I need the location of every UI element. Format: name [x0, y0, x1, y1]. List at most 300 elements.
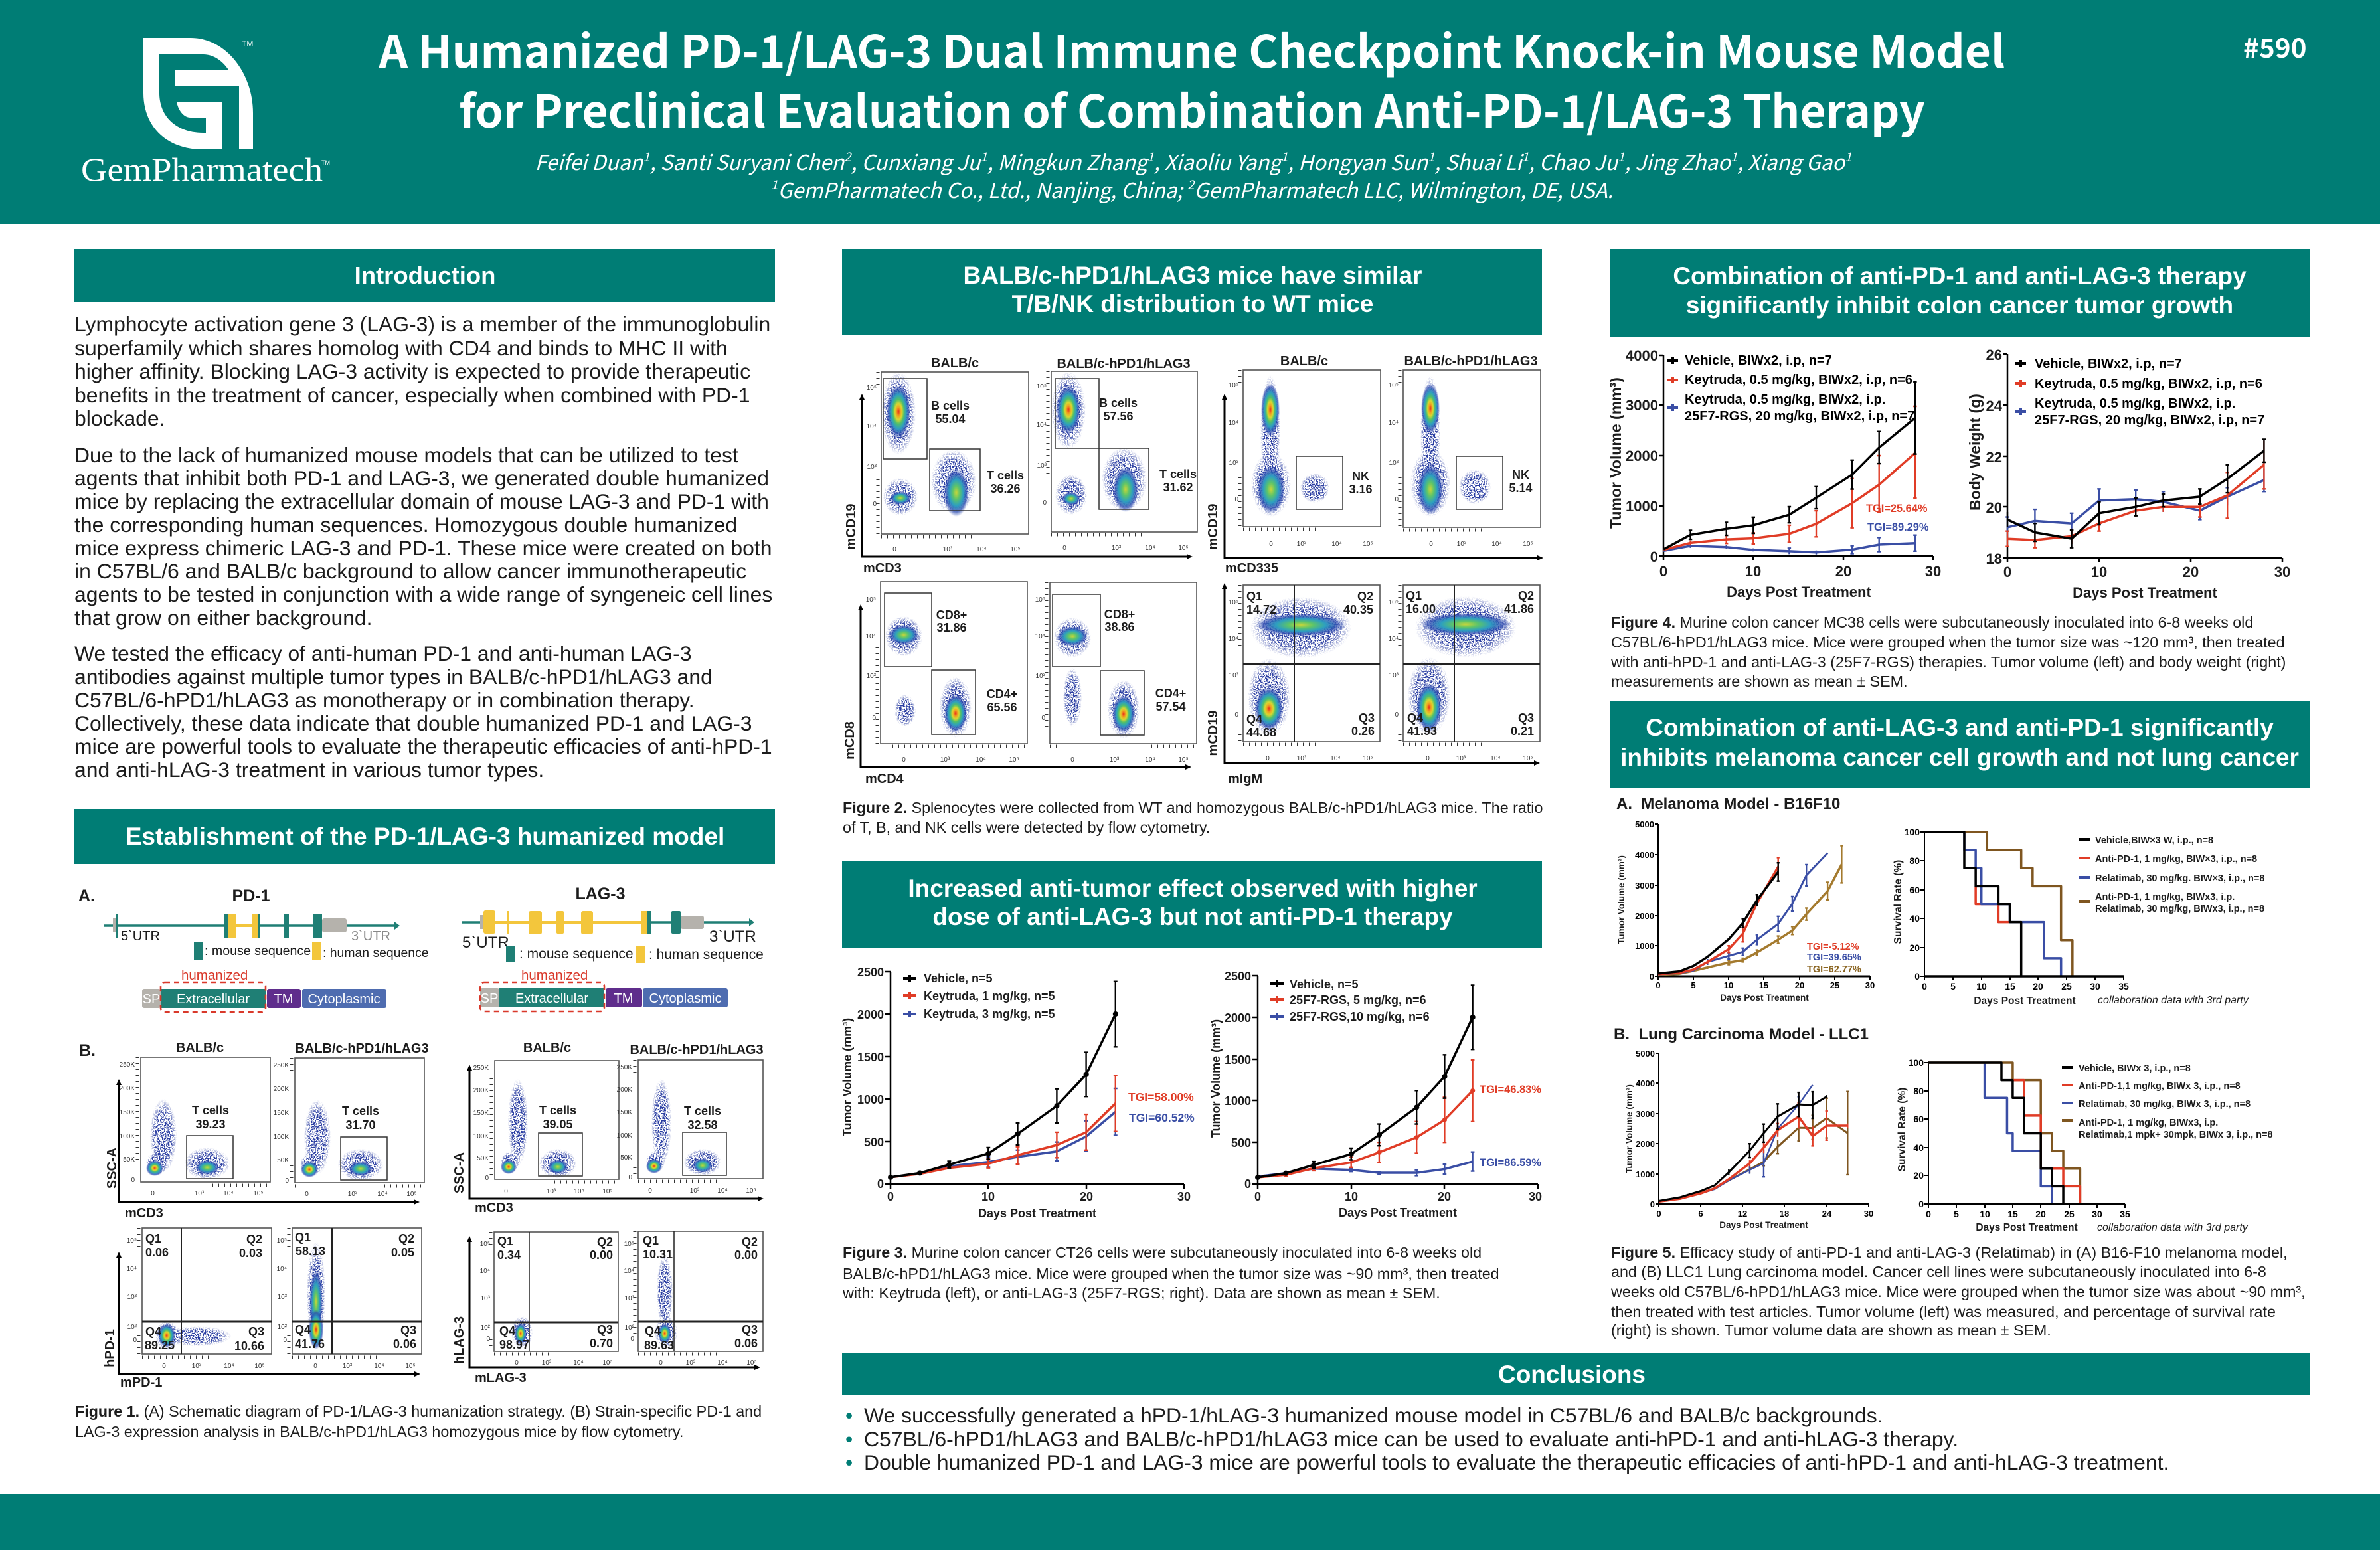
- chart: melanoma tumor volume: 15: [1759, 980, 1768, 990]
- text block: introduction body: benefits in the treatment of cancer, especially when combined with PD-1: [74, 383, 750, 407]
- icon: GemPharmatech logo: TM: [242, 39, 253, 48]
- legend: melanoma survival: [2079, 835, 2264, 914]
- figure 1B: hPD-1 / mPD-1 quadrant plots: 10⁵: [405, 1363, 416, 1370]
- chart: tumor volume Keytruda: 20: [1080, 1190, 1093, 1203]
- figure 2 caption: of T, B, and NK cells were detected by flow cytometry.: [843, 819, 1210, 836]
- figure 5 caption: Figure 5. Efficacy study of anti-PD-1 and anti-LAG-3 (Relatimab) in (A) B16-F10 melanoma model,: [1611, 1244, 2288, 1261]
- legend: melanoma survival: Relatimab, 30 mg/kg, BIWx3, i.p., n=8: [2095, 904, 2264, 914]
- chart: melanoma tumor volume: TGI=39.65%: [1807, 952, 1861, 963]
- figure 1B: hPD-1 / mPD-1 quadrant plots: 10³: [278, 1294, 288, 1301]
- chart: MC38 body weight: 20: [2183, 564, 2199, 580]
- figure 1B: SSC-A / mCD3 flow plots for LAG-3: 39.05: [543, 1118, 573, 1131]
- chart: melanoma survival: 20: [2033, 981, 2043, 991]
- figure 1B: SSC-A / mCD3 flow plots for LAG-3: 50K: [477, 1155, 489, 1162]
- chart: MC38 body weight: 18: [1986, 551, 2002, 567]
- figure 4 caption: C57BL/6-hPD1/hLAG3 mice. Mice were grouped when the tumor size was ~120 mm³, then treated: [1611, 634, 2285, 651]
- figure 1B: SSC-A / mCD3 flow plots for PD-1: T cells: [342, 1104, 379, 1118]
- figure 1B: SSC-A / mCD3 flow plots for LAG-3: 250K: [617, 1064, 632, 1071]
- chart: lung carcinoma survival: 30: [2092, 1209, 2102, 1219]
- figure 1 caption: [75, 1403, 762, 1440]
- figure 1B: hPD-1 / mPD-1 quadrant plots: Q3: [248, 1325, 264, 1338]
- figure 2: mCD19 vs mCD3 flow plots: [844, 356, 1197, 576]
- panel: T/B/NK distribution: T/B/NK distribution to WT mice: [1012, 290, 1373, 317]
- figure 1A: LAG-3 gene schematic: 5`UTR: [462, 934, 509, 952]
- chart: lung carcinoma tumor volume: 0: [1650, 1199, 1655, 1209]
- chart: MC38 body weight: 30: [2274, 564, 2290, 580]
- figure 1B: hPD-1 / mPD-1 quadrant plots: 89.25: [145, 1339, 175, 1352]
- text block: introduction body: Lymphocyte activation gene 3 (LAG-3) is a member of the immunoglobulin: [74, 312, 770, 336]
- figure 2: mCD19 vs mIgM quadrant plots: 0.21: [1511, 725, 1534, 738]
- figure 2: mCD19 vs mCD3 flow plots: 10⁵: [1037, 383, 1047, 390]
- legend: lung carcinoma survival: Anti-PD-1, 1 mg/kg, BIWx3, i.p.: [2079, 1118, 2218, 1128]
- chart: lung carcinoma tumor volume: 18: [1780, 1209, 1789, 1219]
- figure 1A: PD-1 gene schematic: humanized: [181, 968, 248, 983]
- panel: melanoma and lung cancer: [1610, 701, 2310, 1339]
- chart: melanoma survival: Days Post Treatment: [1974, 995, 2076, 1007]
- figure 1A: LAG-3 gene schematic: 3`UTR: [709, 928, 756, 946]
- figure 1B: SSC-A / mCD3 flow plots for PD-1: 200K: [274, 1086, 289, 1093]
- figure 1B: hPD-1 / mPD-1 quadrant plots: Q2: [246, 1233, 262, 1246]
- figure 1B: hPD-1 / mPD-1 quadrant plots: Q4: [295, 1323, 311, 1336]
- figure 2: mCD19 vs mCD3 flow plots: 10⁴: [1037, 422, 1047, 429]
- figure 2: mCD19 vs mIgM quadrant plots: Q3: [1518, 711, 1534, 725]
- figure 1B: SSC-A / mCD3 flow plots for PD-1: 50K: [277, 1157, 289, 1164]
- text block: conclusions list: •: [845, 1450, 853, 1474]
- figure 1B: SSC-A / mCD3 flow plots for PD-1: 250K: [274, 1062, 289, 1069]
- figure 1A: PD-1 gene schematic: PD-1: [232, 887, 270, 905]
- figure 2: mCD19 vs mCD335 flow plots: 10³: [1457, 541, 1467, 548]
- figure 2: mCD19 vs mCD335 flow plots: BALB/c-hPD1/hLAG3: [1404, 354, 1538, 369]
- figure 2: mCD8 vs mCD4 flow plots: 10⁵: [1178, 756, 1189, 764]
- figure 1B: hLAG-3 / mLAG-3 quadrant plots: [452, 1231, 763, 1385]
- figure 5 caption: then treated with test articles. Tumor volume (left) was measured, and percentage of survival rate: [1611, 1303, 2276, 1320]
- figure 1A: LAG-3 gene schematic: : mouse sequence: [519, 946, 634, 962]
- chart: tumor volume Keytruda: 1000: [857, 1093, 884, 1106]
- text block: conclusions list: [845, 1403, 2169, 1474]
- chart: lung carcinoma tumor volume: 30: [1864, 1209, 1873, 1219]
- figure 1A: LAG-3 gene schematic: Extracellular: [515, 991, 588, 1006]
- figure 2: mCD8 vs mCD4 flow plots: 65.56: [987, 701, 1017, 714]
- figure 1B: hPD-1 / mPD-1 quadrant plots: 10⁴: [277, 1266, 287, 1273]
- chart: tumor volume Keytruda: 0: [887, 1190, 894, 1203]
- figure 2: mCD19 vs mIgM quadrant plots: 10³: [1229, 672, 1239, 679]
- figure 1B: SSC-A / mCD3 flow plots for LAG-3: 50K: [620, 1154, 632, 1162]
- text block: conclusions list: •: [845, 1427, 853, 1451]
- legend: melanoma survival: Anti-PD-1, 1 mg/kg, BIW×3, i.p., n=8: [2095, 854, 2257, 865]
- text block: introduction body: mice express chimeric LAG-3 and PD-1. These mice were created on both: [74, 536, 772, 560]
- figure 1B: SSC-A / mCD3 flow plots for PD-1: SSC-A: [105, 1148, 120, 1189]
- figure 2: mCD19 vs mIgM quadrant plots: 44.68: [1246, 726, 1276, 739]
- chart: melanoma survival: 0: [1922, 981, 1927, 991]
- figure 2: mCD19 vs mIgM quadrant plots: mCD19: [1206, 711, 1221, 756]
- chart: lung carcinoma tumor volume: Tumor Volume (mm³): [1624, 1084, 1634, 1173]
- figure 1B: SSC-A / mCD3 flow plots for LAG-3: 150K: [473, 1110, 489, 1117]
- legend: lung carcinoma survival: Relatimab, 30 mg/kg, BIWx 3, i.p., n=8: [2079, 1099, 2251, 1110]
- legend: MC38 tumor volume: 25F7-RGS, 20 mg/kg, BIWx2, i.p, n=7: [1685, 409, 1914, 424]
- panel: conclusions: [842, 1353, 2310, 1474]
- figure 1B: hLAG-3 / mLAG-3 quadrant plots: hLAG-3: [452, 1316, 467, 1364]
- panel: introduction: Introduction: [355, 262, 495, 289]
- chart: lung carcinoma survival: 0: [1918, 1199, 1924, 1209]
- legend: MC38 body weight: Keytruda, 0.5 mg/kg, BIWx2, i.p, n=6: [2035, 377, 2262, 391]
- chart: MC38 body weight: 22: [1986, 449, 2002, 466]
- panel: increased anti-tumor effect: Increased anti-tumor effect observed with higher: [908, 875, 1478, 902]
- chart: MC38 body weight: [1966, 347, 2290, 601]
- figure 1B: hPD-1 / mPD-1 quadrant plots: 10⁴: [224, 1363, 234, 1370]
- figure 1B: hPD-1 / mPD-1 quadrant plots: 10⁴: [127, 1266, 137, 1273]
- figure 1B: hLAG-3 / mLAG-3 quadrant plots: Q4: [499, 1324, 515, 1337]
- figure 1B: SSC-A / mCD3 flow plots for LAG-3: SSC-A: [452, 1152, 467, 1193]
- icon: GemPharmatech logo: TM: [321, 159, 330, 166]
- figure 1B: SSC-A / mCD3 flow plots for LAG-3: mCD3: [475, 1201, 513, 1215]
- figure 2: mCD19 vs mCD335 flow plots: 0: [1429, 541, 1433, 548]
- figure 2: mCD19 vs mIgM quadrant plots: 0.26: [1351, 725, 1375, 738]
- chart: melanoma survival: 35: [2118, 981, 2129, 991]
- chart: lung carcinoma tumor volume: 3000: [1636, 1109, 1655, 1119]
- chart: MC38 tumor volume: 1000: [1626, 498, 1658, 515]
- chart: tumor volume Keytruda: 2500: [857, 966, 884, 979]
- chart: lung carcinoma tumor volume: Days Post Treatment: [1719, 1220, 1808, 1230]
- figure 2: mCD8 vs mCD4 flow plots: 31.86: [936, 621, 967, 634]
- figure 1B: SSC-A / mCD3 flow plots for PD-1: 10⁴: [223, 1190, 234, 1197]
- chart: tumor volume Keytruda: [841, 966, 1195, 1220]
- figure 1B: hPD-1 / mPD-1 quadrant plots: 0.06: [393, 1337, 416, 1351]
- figure 1A: PD-1 gene schematic: Cytoplasmic: [308, 992, 380, 1007]
- figure 2: mCD19 vs mIgM quadrant plots: 14.72: [1246, 603, 1276, 616]
- figure 1B: SSC-A / mCD3 flow plots for PD-1: mCD3: [125, 1206, 163, 1221]
- figure 1A: LAG-3 gene schematic: TM: [614, 991, 633, 1006]
- chart: melanoma tumor volume: 25: [1830, 980, 1839, 990]
- figure 2: mCD8 vs mCD4 flow plots: 10⁴: [1035, 633, 1045, 640]
- figure 1B: hLAG-3 / mLAG-3 quadrant plots: 10³: [481, 1295, 491, 1302]
- figure 2: mCD8 vs mCD4 flow plots: 10⁴: [976, 756, 986, 764]
- chart: lung carcinoma survival: 60: [1913, 1114, 1924, 1124]
- figure 2: mCD19 vs mCD3 flow plots: BALB/c: [931, 356, 979, 371]
- figure 1B: SSC-A / mCD3 flow plots for LAG-3: 10⁴: [574, 1188, 584, 1195]
- figure 1B: SSC-A / mCD3 flow plots for LAG-3: T cells: [684, 1104, 721, 1118]
- figure 2: mCD19 vs mCD335 flow plots: NK: [1352, 470, 1369, 483]
- figure 2 caption: Figure 2. Splenocytes were collected from WT and homozygous BALB/c-hPD1/hLAG3 mice. The ratio: [843, 799, 1543, 816]
- header band: [0, 0, 2380, 224]
- figure 2: mCD19 vs mCD335 flow plots: 0: [1269, 541, 1273, 548]
- chart: melanoma tumor volume: Tumor Volume (mm³): [1616, 855, 1626, 944]
- figure 2: mCD19 vs mCD3 flow plots: 10⁴: [867, 423, 877, 430]
- figure 2: mCD19 vs mIgM quadrant plots: 10⁴: [1229, 636, 1238, 643]
- chart: lung carcinoma survival: Days Post Treatment: [1976, 1222, 2078, 1233]
- figure 1B: hLAG-3 / mLAG-3 quadrant plots: 10⁵: [602, 1359, 613, 1367]
- figure 2: mCD19 vs mCD335 flow plots: 10⁵: [1389, 382, 1399, 389]
- figure 2: mCD19 vs mIgM quadrant plots: 41.93: [1407, 725, 1437, 738]
- legend: MC38 tumor volume: Keytruda, 0.5 mg/kg, BIWx2, i.p, n=6: [1685, 373, 1912, 387]
- figure 1B: SSC-A / mCD3 flow plots for PD-1: 250K: [120, 1061, 135, 1069]
- figure 1A: PD-1 gene schematic: : human sequence: [323, 946, 429, 960]
- chart: lung carcinoma survival: 5: [1954, 1209, 1959, 1219]
- panel: colon cancer combination: Combination of anti-PD-1 and anti-LAG-3 therapy: [1673, 262, 2247, 290]
- figure 2: mCD19 vs mIgM quadrant plots: Q2: [1518, 589, 1534, 602]
- figure 1B: hLAG-3 / mLAG-3 quadrant plots: Q4: [645, 1324, 661, 1337]
- figure 2: mCD19 vs mCD3 flow plots: 0: [1062, 545, 1066, 552]
- figure 2: mCD19 vs mCD3 flow plots: 31.62: [1163, 481, 1193, 494]
- legend: lung carcinoma survival: [2062, 1063, 2273, 1140]
- text block: introduction body: We tested the efficacy of anti-human PD-1 and anti-human LAG-3: [74, 642, 691, 665]
- figure 1B: hPD-1 / mPD-1 quadrant plots: 10⁵: [127, 1237, 137, 1245]
- figure 2: mCD19 vs mCD3 flow plots: 10³: [943, 546, 953, 553]
- figure 2: mCD8 vs mCD4 flow plots: 10³: [867, 673, 877, 680]
- authors and affiliations: 1GemPharmatech Co., Ltd., Nanjing, China; 2GemPharmatech LLC, Wilmington, DE, USA.: [771, 175, 1613, 205]
- figure 1B: hPD-1 / mPD-1 quadrant plots: 0: [162, 1363, 166, 1370]
- legend: Keytruda chart: [903, 972, 1055, 1021]
- panel: increased anti-tumor effect: dose of anti-LAG-3 but not anti-PD-1 therapy: [932, 903, 1453, 930]
- icon: GemPharmatech logo: GemPharmatech: [81, 151, 323, 188]
- chart: lung carcinoma survival: 10: [1980, 1209, 1990, 1219]
- figure 1B: hPD-1 / mPD-1 quadrant plots: 0.03: [239, 1247, 262, 1260]
- figure 1B: hLAG-3 / mLAG-3 quadrant plots: 98.97: [499, 1338, 529, 1351]
- chart: tumor volume 25F7-RGS: 1000: [1225, 1094, 1251, 1108]
- figure 2: mCD19 vs mCD3 flow plots: 10⁵: [867, 385, 877, 392]
- figure 1B: SSC-A / mCD3 flow plots for PD-1: T cells: [192, 1104, 229, 1117]
- heading: melanoma model: A. Melanoma Model - B16F10: [1616, 795, 1840, 813]
- figure 1B: SSC-A / mCD3 flow plots for PD-1: 10⁴: [377, 1191, 388, 1198]
- figure 1B: SSC-A / mCD3 flow plots for PD-1: 10³: [348, 1191, 358, 1198]
- chart: melanoma tumor volume: 0: [1650, 972, 1654, 982]
- figure 2: mCD19 vs mCD335 flow plots: [1206, 354, 1543, 576]
- figure 2: mCD19 vs mCD335 flow plots: 10⁴: [1229, 420, 1238, 427]
- figure 1B: SSC-A / mCD3 flow plots for PD-1: 200K: [120, 1085, 135, 1092]
- figure 1A: PD-1 gene schematic: 3`UTR: [351, 929, 390, 944]
- text block: introduction body: that grow on either background.: [74, 606, 373, 630]
- chart: tumor volume Keytruda: 500: [864, 1136, 884, 1149]
- figure 1 caption: Figure 1. (A) Schematic diagram of PD-1/LAG-3 humanization strategy. (B) Strain-specific PD-1 and: [75, 1403, 762, 1420]
- panel: T/B/NK distribution: BALB/c-hPD1/hLAG3 mice have similar: [964, 262, 1422, 289]
- chart: tumor volume 25F7-RGS: 30: [1529, 1190, 1542, 1203]
- chart: tumor volume 25F7-RGS: 2500: [1225, 970, 1251, 983]
- chart: tumor volume 25F7-RGS: 1500: [1225, 1053, 1251, 1067]
- figure 1B: SSC-A / mCD3 flow plots for LAG-3: 0: [648, 1187, 652, 1195]
- figure 2: mCD19 vs mIgM quadrant plots: 10⁴: [1490, 755, 1501, 762]
- figure 1B: SSC-A / mCD3 flow plots for LAG-3: 100K: [473, 1133, 489, 1140]
- figure 2: mCD19 vs mIgM quadrant plots: Q4: [1407, 711, 1423, 725]
- figure 2: mCD19 vs mIgM quadrant plots: 10⁵: [1389, 599, 1399, 606]
- figure 2: mCD8 vs mCD4 flow plots: 10³: [940, 756, 950, 764]
- figure 2: mCD8 vs mCD4 flow plots: 10⁵: [1035, 596, 1045, 604]
- figure 2: mCD19 vs mIgM quadrant plots: Q4: [1246, 713, 1262, 726]
- figure 1A: LAG-3 gene schematic: LAG-3: [575, 885, 626, 903]
- figure 1B: SSC-A / mCD3 flow plots for LAG-3: 10⁵: [602, 1188, 613, 1195]
- figure 2: mCD19 vs mCD335 flow plots: 10⁴: [1389, 420, 1399, 427]
- figure 1B: hLAG-3 / mLAG-3 quadrant plots: 0: [515, 1359, 519, 1367]
- figure 1B: hLAG-3 / mLAG-3 quadrant plots: 0.70: [590, 1337, 613, 1350]
- figure 1B: hLAG-3 / mLAG-3 quadrant plots: 10²: [625, 1324, 635, 1332]
- chart: melanoma survival: 60: [1909, 885, 1920, 895]
- figure 1B: hPD-1 / mPD-1 quadrant plots: 10³: [192, 1363, 202, 1370]
- text block: introduction body: agents that inhibit both PD-1 and LAG-3, we generated double humanized: [74, 466, 769, 490]
- chart: MC38 tumor volume: Tumor Volume (mm³): [1607, 377, 1624, 529]
- figure 2: mCD19 vs mIgM quadrant plots: Q1: [1406, 589, 1422, 602]
- figure 2: mCD19 vs mIgM quadrant plots: 10⁵: [1363, 755, 1373, 762]
- figure 1B: hLAG-3 / mLAG-3 quadrant plots: 10³: [625, 1295, 635, 1302]
- figure 5 caption: [1610, 1244, 2306, 1339]
- legend: 25F7-RGS chart: 25F7-RGS,10 mg/kg, n=6: [1290, 1010, 1430, 1023]
- figure 2: mCD19 vs mIgM quadrant plots: 10³: [1297, 755, 1307, 762]
- figure 2: mCD19 vs mCD335 flow plots: mCD335: [1225, 561, 1278, 576]
- chart: tumor volume 25F7-RGS: 10: [1345, 1190, 1358, 1203]
- figure 1B: hLAG-3 / mLAG-3 quadrant plots: 10²: [481, 1324, 491, 1332]
- figure 2: mCD19 vs mCD335 flow plots: 10⁴: [1331, 541, 1342, 548]
- panel: melanoma and lung cancer: Combination of anti-LAG-3 and anti-PD-1 significantly: [1646, 714, 2274, 741]
- figure 2: mCD19 vs mCD3 flow plots: BALB/c-hPD1/hLAG3: [1057, 357, 1191, 371]
- chart: tumor volume 25F7-RGS: [1209, 970, 1542, 1219]
- figure 2: mCD19 vs mIgM quadrant plots: 0: [1395, 711, 1399, 719]
- figure 1A: LAG-3 gene schematic: Cytoplasmic: [649, 991, 721, 1006]
- figure 1B: hLAG-3 / mLAG-3 quadrant plots: 10.31: [643, 1248, 673, 1261]
- panel: establishment of humanized model: Establishment of the PD-1/LAG-3 humanized model: [126, 823, 724, 850]
- figure 1B: hLAG-3 / mLAG-3 quadrant plots: 10⁴: [480, 1268, 490, 1275]
- text block: introduction body: mice are powerful tools to evaluate the therapeutic efficacies of anti-hPD-1: [74, 734, 772, 758]
- chart: melanoma survival: 15: [2005, 981, 2015, 991]
- figure 2: mCD19 vs mCD335 flow plots: 10³: [1297, 541, 1307, 548]
- figure 1B: hLAG-3 / mLAG-3 quadrant plots: 0: [630, 1335, 634, 1343]
- chart: tumor volume 25F7-RGS: 0: [1254, 1190, 1261, 1203]
- figure 1B: hLAG-3 / mLAG-3 quadrant plots: 0.34: [497, 1249, 521, 1262]
- legend: Keytruda chart: Keytruda, 1 mg/kg, n=5: [924, 990, 1055, 1003]
- heading: lung carcinoma model: B. Lung Carcinoma Model - LLC1: [1614, 1025, 1869, 1043]
- chart: lung carcinoma tumor volume: 6: [1698, 1209, 1703, 1219]
- figure 2: mCD8 vs mCD4 flow plots: 57.54: [1155, 700, 1186, 713]
- figure 2: mCD8 vs mCD4 flow plots: CD4+: [1155, 687, 1186, 700]
- figure 2: mCD8 vs mCD4 flow plots: 10³: [1036, 673, 1046, 680]
- figure 2: mCD8 vs mCD4 flow plots: 10⁵: [866, 596, 876, 604]
- legend: Keytruda chart: Keytruda, 3 mg/kg, n=5: [924, 1007, 1055, 1021]
- figure 1B: SSC-A / mCD3 flow plots for PD-1: [79, 1041, 429, 1221]
- text block: introduction body: in C57BL/6 and BALB/c background to allow cancer immunotherapeutic: [74, 559, 746, 583]
- chart: melanoma tumor volume: 1000: [1635, 941, 1654, 951]
- authors and affiliations: [535, 147, 1851, 205]
- chart: tumor volume Keytruda: 0: [877, 1177, 884, 1191]
- icon: GemPharmatech logo: [81, 38, 330, 188]
- figure 2 caption: [843, 799, 1543, 836]
- chart: tumor volume Keytruda: 1500: [857, 1051, 884, 1064]
- chart: tumor volume 25F7-RGS: 2000: [1225, 1011, 1251, 1025]
- figure 2: mCD19 vs mIgM quadrant plots: 0: [1234, 711, 1238, 719]
- figure 1B: hPD-1 / mPD-1 quadrant plots: 10³: [128, 1294, 137, 1301]
- figure 2: mCD19 vs mIgM quadrant plots: Q3: [1359, 711, 1375, 725]
- figure 2: mCD8 vs mCD4 flow plots: 0: [1041, 715, 1045, 722]
- figure 2: mCD8 vs mCD4 flow plots: 0: [872, 715, 876, 722]
- panel: colon cancer combination: [1607, 249, 2310, 690]
- chart: MC38 body weight: 0: [2003, 564, 2011, 580]
- text block: introduction body: antibodies against multiple tumor types in BALB/c-hPD1/hLAG3 and: [74, 665, 713, 689]
- chart: MC38 body weight: Days Post Treatment: [2073, 584, 2217, 601]
- text block: introduction body: superfamily which shares homolog with CD4 and binds to MHC II with: [74, 336, 728, 360]
- figure 1B: hLAG-3 / mLAG-3 quadrant plots: 0.06: [734, 1337, 758, 1350]
- chart: MC38 tumor volume: 0: [1659, 563, 1667, 580]
- figure 2: mCD8 vs mCD4 flow plots: 10⁴: [1145, 756, 1155, 764]
- chart: tumor volume 25F7-RGS: Tumor Volume (mm³): [1209, 1019, 1223, 1138]
- text block: introduction body: C57BL/6-hPD1/hLAG3 as monotherapy or in combination therapy.: [74, 688, 695, 712]
- figure 2: mCD19 vs mCD335 flow plots: mCD19: [1206, 504, 1221, 549]
- legend: MC38 body weight: Vehicle, BIWx2, i.p, n=7: [2035, 357, 2182, 371]
- chart: MC38 tumor volume: 3000: [1626, 397, 1658, 414]
- legend: MC38 tumor volume: [1667, 353, 1914, 424]
- figure 5 caption: and (B) LLC1 Lung carcinoma model. Cancer cell lines were subcutaneously inoculated into 6-8: [1611, 1263, 2266, 1280]
- text block: conclusions list: •: [845, 1403, 853, 1427]
- figure 5 caption: (right) is shown. Tumor volume data are shown as mean ± SEM.: [1611, 1322, 2051, 1339]
- chart: lung carcinoma survival: [1897, 1057, 2273, 1233]
- figure 1A: PD-1 gene schematic: : mouse sequence: [205, 944, 311, 958]
- figure 1B: hPD-1 / mPD-1 quadrant plots: 0.05: [391, 1246, 414, 1259]
- figure 1A: PD-1 gene schematic: SP: [143, 992, 160, 1007]
- figure 2: mCD19 vs mIgM quadrant plots: 10³: [1456, 755, 1466, 762]
- chart: lung carcinoma tumor volume: 2000: [1636, 1139, 1655, 1149]
- chart: melanoma survival: 100: [1905, 827, 1920, 837]
- figure 2: mCD19 vs mCD335 flow plots: 10⁵: [1363, 541, 1373, 548]
- figure 1A: LAG-3 gene schematic: : human sequence: [649, 947, 764, 962]
- figure 5 caption: weeks old C57BL/6-hPD1/hLAG3 mice. Mice were grouped when the tumor size was about ~90 mm³,: [1610, 1283, 2306, 1300]
- figure 1B: hPD-1 / mPD-1 quadrant plots: Q1: [295, 1231, 311, 1244]
- chart: melanoma tumor volume: 3000: [1635, 881, 1654, 891]
- chart: MC38 tumor volume: 4000: [1626, 347, 1658, 364]
- panel: melanoma and lung cancer: inhibits melanoma cancer cell growth and not lung cancer: [1620, 744, 2299, 771]
- figure 1B: hPD-1 / mPD-1 quadrant plots: 10²: [128, 1324, 137, 1331]
- figure 2: mCD19 vs mCD3 flow plots: 10⁴: [976, 546, 987, 553]
- figure 2: mCD19 vs mCD335 flow plots: 10³: [1389, 460, 1399, 467]
- legend: 25F7-RGS chart: 25F7-RGS, 5 mg/kg, n=6: [1290, 993, 1426, 1007]
- figure 1B: hPD-1 / mPD-1 quadrant plots: hPD-1: [103, 1329, 118, 1367]
- figure 1B: hPD-1 / mPD-1 quadrant plots: 10.66: [234, 1339, 264, 1353]
- legend: lung carcinoma survival: Vehicle, BIWx 3, i.p., n=8: [2079, 1063, 2191, 1074]
- figure 2: mCD19 vs mCD3 flow plots: 0: [892, 546, 896, 553]
- figure 1B: hPD-1 / mPD-1 quadrant plots: 10⁵: [277, 1237, 287, 1245]
- chart: lung carcinoma survival: 20: [2035, 1209, 2046, 1219]
- title: [379, 17, 2005, 141]
- panel: establishment of humanized model: [74, 809, 775, 1440]
- figure 1B: SSC-A / mCD3 flow plots for PD-1: 100K: [120, 1133, 135, 1140]
- figure 2: mCD8 vs mCD4 flow plots: mCD8: [843, 721, 857, 760]
- chart: lung carcinoma tumor volume: 24: [1822, 1209, 1832, 1219]
- figure 2: mCD19 vs mIgM quadrant plots: Q1: [1246, 590, 1262, 603]
- figure 2: mCD19 vs mCD335 flow plots: NK: [1512, 468, 1529, 481]
- figure 1B: hLAG-3 / mLAG-3 quadrant plots: Q2: [597, 1235, 613, 1249]
- figure 1A: PD-1 gene schematic: [78, 887, 429, 1012]
- text block: introduction body: [74, 312, 772, 782]
- figure 1B: hPD-1 / mPD-1 quadrant plots: 41.76: [295, 1337, 325, 1351]
- chart: MC38 body weight: 26: [1986, 347, 2002, 363]
- panel: increased anti-tumor effect: [841, 861, 1542, 1302]
- text block: conclusions list: C57BL/6-hPD1/hLAG3 and BALB/c-hPD1/hLAG3 mice can be used to evaluate anti-hPD-1 and anti-hLAG-3 therapy.: [864, 1427, 1958, 1451]
- text block: introduction body: agents to be tested in conjunction with a wide range of syngeneic cell lines: [74, 582, 772, 606]
- figure 2: mCD19 vs mIgM quadrant plots: 10⁴: [1389, 636, 1399, 643]
- text block: conclusions list: Double humanized PD-1 and LAG-3 mice are powerful tools to evaluate the therapeutic efficacies of anti-hPD-1 and anti-hLAG-3 treatment.: [864, 1450, 2169, 1474]
- chart: tumor volume 25F7-RGS: 500: [1231, 1136, 1251, 1150]
- chart: tumor volume Keytruda: Tumor Volume (mm³): [841, 1018, 854, 1136]
- figure 2: mCD8 vs mCD4 flow plots: 10⁵: [1009, 756, 1019, 764]
- figure 2: mCD19 vs mIgM quadrant plots: 10⁴: [1330, 755, 1341, 762]
- text block: introduction body: the corresponding human sequences. Homozygous double humanized: [74, 513, 737, 537]
- figure 1B: hLAG-3 / mLAG-3 quadrant plots: Q2: [742, 1235, 758, 1249]
- figure 1B: hPD-1 / mPD-1 quadrant plots: mPD-1: [120, 1375, 162, 1390]
- figure 4 caption: measurements are shown as mean ± SEM.: [1611, 673, 1908, 690]
- chart: melanoma tumor volume: 5: [1691, 980, 1696, 990]
- panel: introduction: [74, 249, 775, 782]
- chart: tumor volume Keytruda: 2000: [857, 1008, 884, 1021]
- figure 1B: hLAG-3 / mLAG-3 quadrant plots: 10⁴: [573, 1359, 584, 1367]
- figure 1B: SSC-A / mCD3 flow plots for PD-1: 150K: [274, 1110, 289, 1117]
- legend: lung carcinoma survival: Relatimab,1 mpk+ 30mpk, BIWx 3, i.p., n=8: [2079, 1130, 2273, 1140]
- figure 1B: SSC-A / mCD3 flow plots for PD-1: 10⁵: [406, 1191, 417, 1198]
- figure 2: mCD19 vs mCD3 flow plots: 10³: [867, 464, 877, 471]
- figure 2: mCD19 vs mIgM quadrant plots: [1206, 583, 1540, 786]
- figure 1B: hLAG-3 / mLAG-3 quadrant plots: Q3: [597, 1323, 613, 1336]
